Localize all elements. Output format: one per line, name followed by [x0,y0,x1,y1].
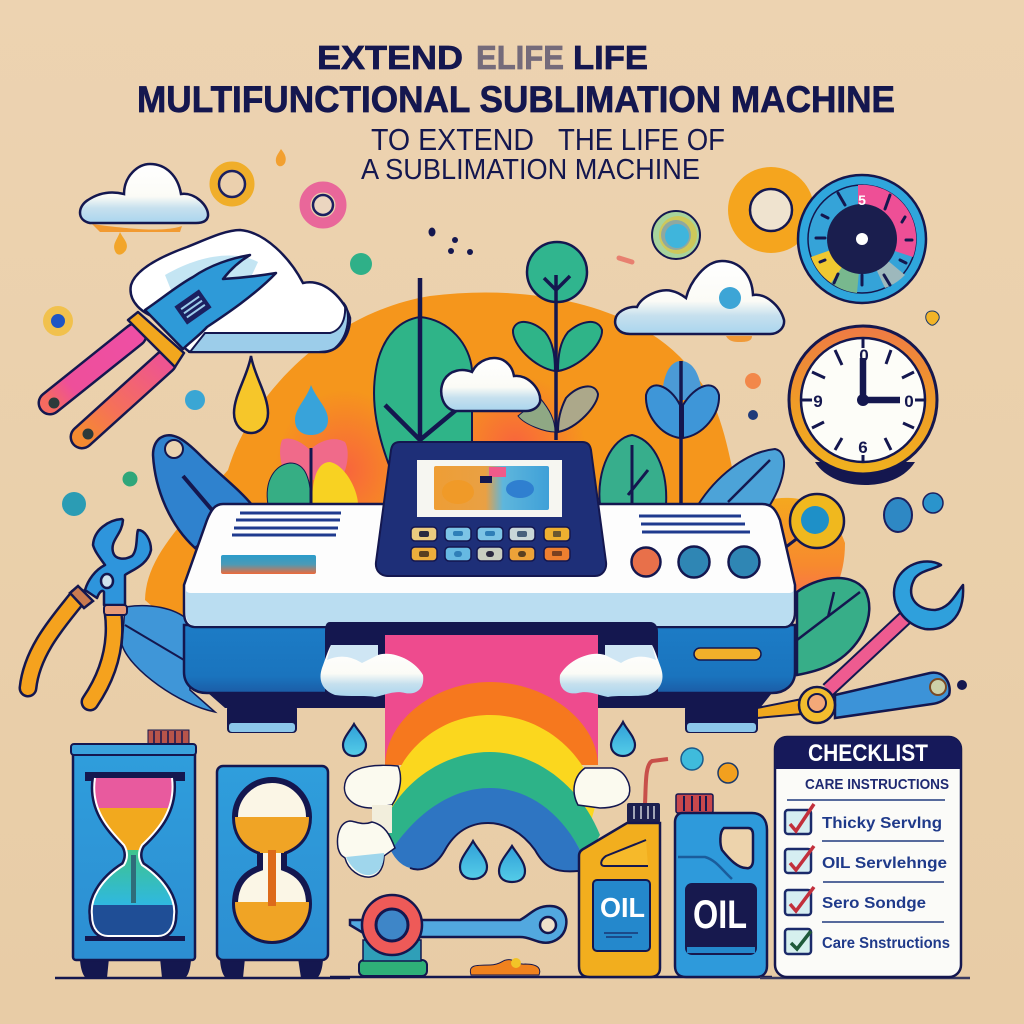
output slot [325,622,658,708]
subtitle line 1: TO EXTEND [371,122,534,157]
hourglass highlight [92,778,174,936]
cabinet feet [220,958,323,978]
right ring on stem [782,494,844,550]
rainbow cloud right [574,768,630,808]
cabinet body [73,748,195,960]
clock base [815,462,915,485]
blue water drop [295,385,328,435]
round button red [632,548,660,576]
pliers pivot [101,574,113,588]
label fine lines [604,933,638,937]
big leaf stem [385,278,456,440]
rules [787,800,945,922]
keypad glyphs [419,531,562,557]
blue band [391,788,585,871]
rainbow print [385,635,600,871]
shelf line [55,977,772,978]
cloud top left [80,164,208,232]
checklist row 3: Sero Sondge [822,895,926,912]
clock numerals: 0 [859,346,869,365]
vent right [639,516,750,532]
green lollipop plant [513,242,602,440]
blue dot [185,390,205,410]
green band [386,752,600,860]
printer top body [184,504,795,627]
small plant stem [310,448,312,505]
bottle body [579,823,660,977]
pink ring inner outline [313,195,333,215]
red wheel [362,895,422,955]
yellow ring [214,166,250,202]
spout [645,759,668,804]
printer lower body [184,625,795,693]
pink heart [280,438,348,480]
small yellow dot right [926,311,939,325]
bottle cap [627,803,660,823]
big green leaf [374,317,472,480]
blue leaf right [698,449,784,505]
subheading: CARE INSTRUCTIONS [805,776,949,793]
screen [417,460,562,517]
blue band outline [410,823,578,871]
cloud blue shading [165,256,258,325]
checklist row 1 [785,804,942,834]
hourglass cabinet 1 [71,730,196,978]
big cloud [131,230,350,352]
label text: OIL [600,892,645,923]
hourglass fill [235,817,309,941]
gauge dial [798,175,926,303]
plants behind machine [267,242,784,505]
bottle cap [676,794,713,813]
wrench hole [540,917,556,933]
clock numerals: 6 [858,438,868,457]
title line 1: EXTEND [317,39,463,76]
keypad [411,527,570,561]
subtitle line 2: A SUBLIMATION MACHINE [361,154,700,186]
orange dot [718,763,738,783]
pliers collar left [70,586,93,608]
orange drop top [276,149,286,166]
pliers handle right [90,612,114,702]
green leaf right of panel [599,435,666,505]
cabinet feet [80,958,191,978]
cabinet lid [71,744,196,755]
bottle body [675,813,767,977]
small multicolour ring [652,211,700,259]
pliers handle left [28,597,78,688]
yellow drop [234,356,268,433]
shears label [174,289,212,325]
screen image [434,466,549,510]
water drops [343,722,635,882]
pliers head [85,519,151,605]
gauge numeral: 5 [858,192,866,208]
orange sun backdrop [145,292,732,616]
bottle ridge [601,840,648,866]
clock hands [863,358,900,400]
pink ring [305,187,341,223]
title block [137,39,895,186]
yellow oil bottle [579,759,668,977]
orange patch right [768,498,845,610]
blue oil bottle [675,794,767,977]
checklist row 4 [785,929,950,954]
clock face [801,338,925,462]
checklist row 4: Care Snstructions [822,935,950,952]
frame bars [85,772,185,941]
cloud filler pale [372,805,392,833]
wrench bottom [350,895,566,976]
orange band [385,682,598,765]
left teal dots [62,472,138,516]
blue paddle left with hole [153,435,252,548]
pliers collar right [104,605,127,615]
cloud lower blue [346,853,384,875]
clock pivot [857,394,869,406]
green leaf right lower vein [797,592,860,640]
hourglass cabinet 2 [217,766,328,978]
orange blob [470,960,540,975]
small navy speck [748,410,758,420]
label text: OIL [693,893,747,937]
green dot [350,253,372,275]
cabinet cap [148,730,189,745]
title line 1 [317,39,648,76]
left foot [227,705,297,733]
big cloud with shears [48,230,350,440]
subtitle line 1 [371,122,725,157]
blob yellow dot [511,958,521,968]
checklist row 2 [785,846,947,873]
clock ticks [802,338,925,462]
cloud tray right [560,645,662,697]
yellow joint [799,687,835,723]
teal support [363,940,421,961]
blue leaf vein [728,460,770,502]
bottle label [593,880,650,951]
right drops [884,493,943,532]
wheel hub [376,909,408,941]
title line 1: ELIFE [476,39,564,76]
green leaf right lower [797,578,869,675]
yellow slot [694,648,761,660]
blue lower left shape [122,606,215,712]
label strip [687,947,755,953]
small cloud centre [441,358,540,411]
yellow blue dot [43,306,73,336]
checklist row 3 [785,887,926,915]
rainbow cloud left lower [338,821,395,877]
orange gear [728,167,814,253]
clock numerals [813,346,914,457]
checklist card [760,737,970,978]
yellow bar lower right [757,699,802,718]
clock numerals: 9 [813,392,823,411]
hourglass outline [92,778,174,936]
hourglass outline [235,780,309,941]
cyan dot [681,748,703,770]
handle 1 [48,335,135,408]
multifunction printer [184,442,795,733]
spanner right [828,562,963,690]
rainbow cloud left upper [344,765,400,808]
pink sheet [385,635,598,765]
control panel [376,442,606,576]
header text: CHECKLIST [808,740,928,767]
card shadow line [760,977,970,979]
colour swatch [221,555,316,574]
handle hole [720,828,753,868]
handle 2 [82,362,165,440]
green base [359,960,427,976]
checklist row 2: OIL Servlehnge [822,855,947,872]
card header [775,737,961,769]
green leaf vein [628,445,648,505]
small orange drop [114,232,127,255]
vent left [232,513,341,535]
yellow band [388,715,597,825]
title line 1: LIFE [573,39,648,76]
shoulder line [678,857,732,879]
right foot [685,705,758,733]
wall clock [789,326,937,485]
checklist row 1: Thicky Servlng [822,815,942,832]
subtitle line 1: THE LIFE OF [558,122,725,157]
cloud tray left [321,645,423,697]
hourglass fill [92,778,174,935]
shears collar [128,312,184,367]
bottle label [685,883,757,955]
round button blue 2 [728,546,760,578]
small orange speck [745,373,761,389]
cloud lower lip [190,305,348,352]
title line 2: MULTIFUNCTIONAL SUBLIMATION MACHINE [137,79,895,120]
scattered dark dots [428,228,473,255]
printer dark base [208,693,772,708]
round button blue 1 [678,546,710,578]
shears head [145,255,276,349]
cloud top right [615,261,784,342]
small pink speck [619,258,632,262]
card body [775,737,961,977]
clock numerals: 0 [904,392,914,411]
cabinet body [217,766,328,960]
green small leaf [267,463,311,505]
blue tube lower right [835,673,950,718]
clock rim [789,326,937,474]
pliers left [28,519,151,702]
light blue band [186,590,794,626]
yellow ring inner outline [219,171,245,197]
blue plant [646,361,719,505]
wrench bar [350,906,566,943]
navy dot right [957,680,967,690]
yellow leaf [312,462,358,505]
